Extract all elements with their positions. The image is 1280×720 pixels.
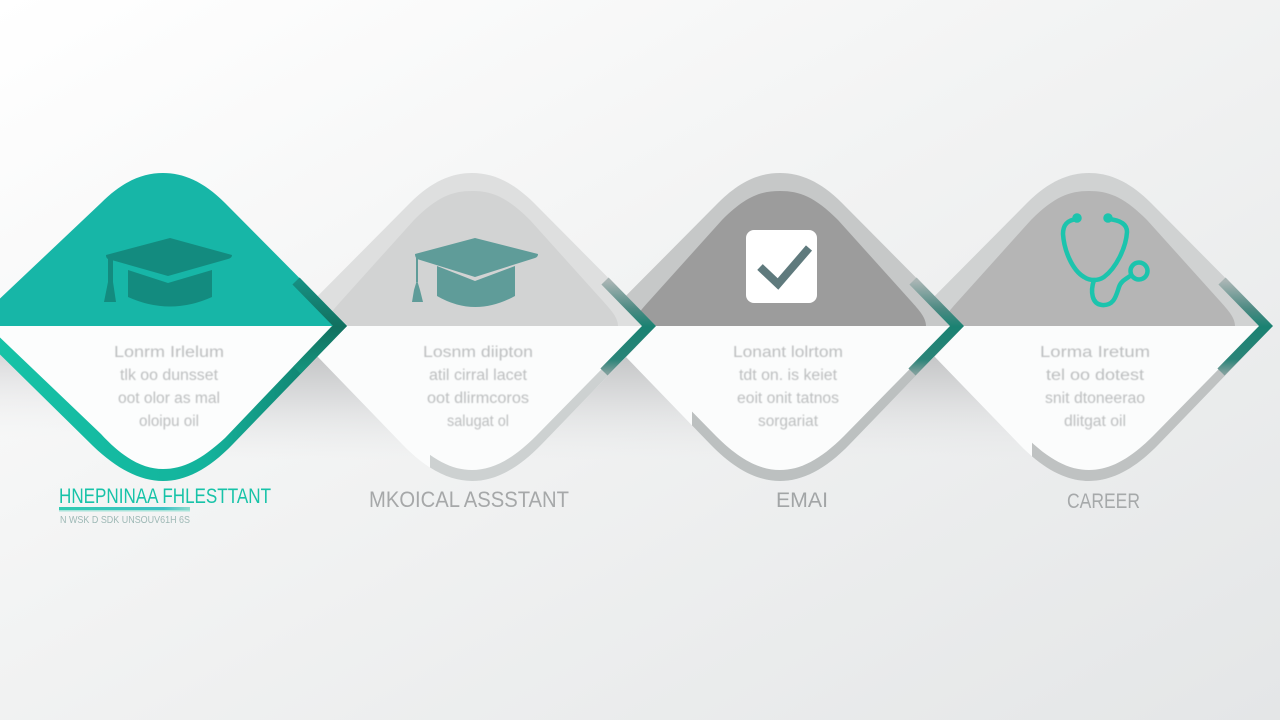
text block step 2 bbox=[423, 344, 533, 430]
text block step 1: Lonrm Irlelum bbox=[114, 344, 224, 361]
text block step 2: atil cirral lacet bbox=[429, 367, 528, 384]
text block step 1: tlk oo dunsset bbox=[120, 367, 219, 384]
top fill step 4 bbox=[943, 191, 1235, 326]
icon: graduation cap dark bbox=[104, 238, 232, 306]
drop shadows between diamonds bbox=[0, 350, 1061, 460]
heading: step 1 label: N WSK D SDK UNSOUV61H 6S bbox=[60, 515, 190, 526]
panel: step 1 highlighted bbox=[0, 173, 347, 481]
text block step 4: Lorma Iretum bbox=[1040, 344, 1150, 361]
icon: stethoscope bbox=[1063, 216, 1148, 305]
panel: step 3 email bbox=[596, 173, 964, 481]
heading: step 1 label: HNEPNINAA FHLESTTANT bbox=[59, 485, 271, 508]
text block step 2: salugat ol bbox=[447, 413, 509, 430]
text block step 3: sorgariat bbox=[758, 413, 819, 430]
text block step 4 bbox=[1040, 344, 1150, 430]
text block step 3: tdt on. is keiet bbox=[739, 367, 838, 384]
heading: step 3 label: EMAI bbox=[776, 489, 828, 512]
top fill step 3 bbox=[634, 191, 926, 326]
text block step 3 bbox=[733, 344, 843, 430]
heading: step 4 label: CAREER bbox=[1067, 490, 1140, 513]
top fill step 2 bbox=[326, 191, 618, 326]
text block step 4: snit dtoneerao bbox=[1045, 390, 1145, 407]
text block step 2: oot dlirmcoros bbox=[427, 390, 529, 407]
text block step 4: tel oo dotest bbox=[1046, 367, 1145, 384]
text block step 4: dlitgat oil bbox=[1064, 413, 1126, 430]
icon: graduation cap bbox=[412, 238, 538, 307]
text block step 1 bbox=[114, 344, 224, 430]
text block step 3: Lonant lolrtom bbox=[733, 344, 843, 361]
white lower area step 1 bbox=[0, 326, 332, 469]
panel: step 2 medical assistant bbox=[288, 173, 656, 481]
text block step 3: eoit onit tatnos bbox=[737, 390, 839, 407]
text block step 2: Losnm diipton bbox=[423, 344, 533, 361]
icon: checkbox bbox=[746, 230, 817, 303]
heading: step 2 label: MKOICAL ASSSTANT bbox=[369, 487, 569, 512]
text block step 1: oot olor as mal bbox=[118, 390, 220, 407]
heading: step 1 label bbox=[59, 485, 271, 526]
text block step 1: oloipu oil bbox=[139, 413, 199, 430]
panel: step 4 career bbox=[905, 173, 1273, 481]
